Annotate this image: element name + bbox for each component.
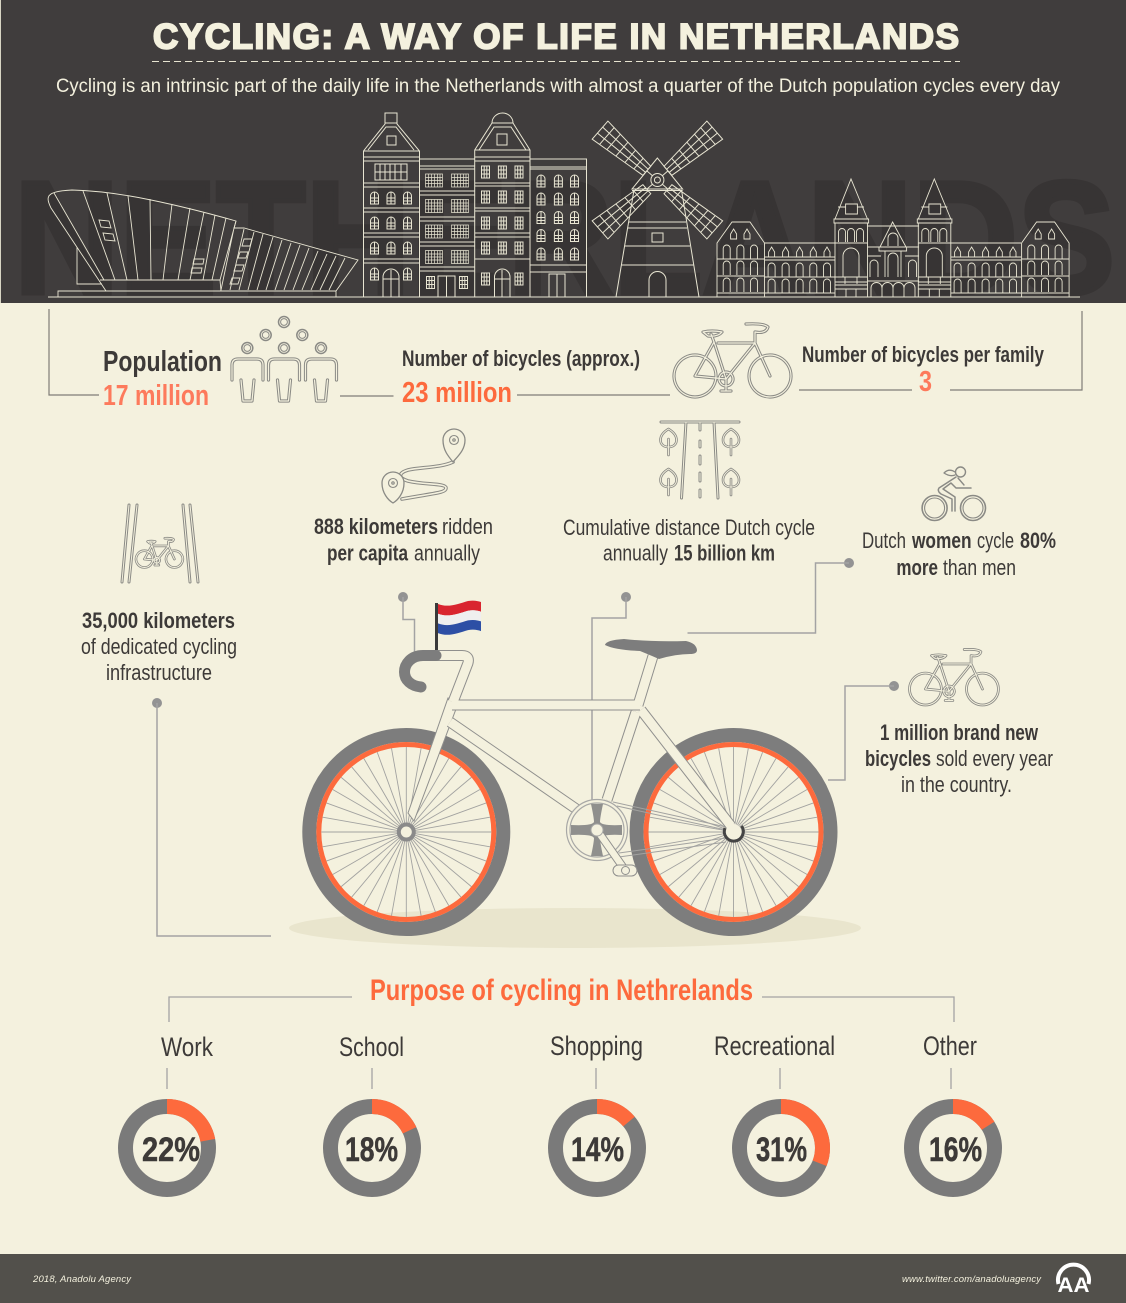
text: cumulative distance: 15 billion km — [674, 540, 775, 566]
text: dedicated infrastructure — [81, 608, 237, 685]
stat: number of bicycles: 23 million — [402, 377, 512, 409]
connector: top stats frame — [49, 309, 1082, 396]
heading: purpose of cycling: Purpose of cycling in Nethrelands — [370, 974, 753, 1007]
donut: recreational — [714, 1031, 835, 1190]
connector: cumulative distance — [592, 592, 631, 800]
text: cumulative distance — [563, 515, 815, 566]
stat: bicycles per family — [802, 342, 1045, 398]
icon: canal house D — [530, 159, 586, 297]
text: kilometers per capita: annually — [414, 540, 480, 566]
ground shadow — [289, 908, 861, 948]
text: bicycles sold: bicycles — [865, 746, 931, 771]
skyline illustration — [48, 113, 1080, 297]
icon: cycling lane — [122, 505, 198, 582]
text: dedicated infrastructure: 35,000 kilometers — [82, 608, 235, 633]
logo: AA — [1058, 1274, 1090, 1297]
icon: canal house A — [364, 113, 420, 297]
icon: route pins — [382, 429, 465, 503]
connector: infrastructure — [152, 698, 271, 936]
donut: work: Work — [161, 1032, 213, 1062]
stat: population — [103, 346, 222, 412]
donut: recreational: Recreational — [714, 1031, 835, 1061]
donut: other — [912, 1031, 994, 1190]
donut: work: 22% — [142, 1131, 200, 1169]
illustration: bicycle — [309, 601, 830, 929]
donut: school: School — [339, 1032, 404, 1062]
ground line — [48, 296, 1080, 298]
connector: sold — [828, 681, 899, 780]
rear wheel — [636, 735, 830, 929]
title underline — [152, 60, 960, 62]
text: women cycle more: Dutch — [862, 528, 906, 553]
footer — [0, 1254, 1126, 1303]
donut: shopping — [550, 1031, 643, 1190]
chain — [613, 802, 726, 857]
text: kilometers per capita: per capita — [327, 540, 409, 566]
icon: road with trees — [660, 422, 739, 498]
heading: purpose of cycling — [169, 974, 954, 1022]
credit: 2018, Anadolu Agency — [32, 1274, 132, 1285]
subtitle: Cycling is an intrinsic part of the daily life in the Netherlands with almost a quarter of the Dutch population cycles every day — [56, 76, 1060, 97]
text: cumulative distance: Cumulative distance Dutch cycle — [563, 515, 815, 540]
stat: number of bicycles: Number of bicycles (approx.) — [402, 346, 640, 371]
icon: canal house B — [420, 159, 474, 297]
icon: bicycle — [674, 324, 791, 397]
text: women cycle more: than men — [943, 555, 1016, 580]
stat: number of bicycles — [402, 346, 640, 409]
text: kilometers per capita: ridden — [442, 514, 493, 539]
text: dedicated infrastructure: infrastructure — [106, 660, 212, 685]
icon: windmill — [592, 121, 723, 297]
donut: shopping: 14% — [571, 1131, 624, 1169]
icon: NEMO building — [48, 190, 358, 297]
icon: people — [232, 316, 336, 401]
donut: school: 18% — [345, 1131, 398, 1169]
icon: museum — [717, 179, 1069, 297]
saddle — [605, 639, 697, 659]
text: bicycles sold — [865, 720, 1053, 797]
text: kilometers per capita — [314, 514, 493, 566]
text: bicycles sold: 1 million brand new — [880, 720, 1039, 745]
flag — [435, 601, 481, 650]
title: CYCLING: A WAY OF LIFE IN NETHERLANDS — [153, 18, 959, 56]
stat: bicycles per family: Number of bicycles per family — [802, 342, 1045, 367]
donut: other: 16% — [929, 1131, 982, 1169]
frame — [436, 656, 731, 826]
text: women cycle more: 80% — [1020, 528, 1056, 553]
text: bicycles sold: in the country. — [901, 772, 1012, 797]
logo — [1058, 1265, 1090, 1297]
header panel — [0, 0, 1126, 327]
donut: shopping: Shopping — [550, 1031, 643, 1061]
text: women cycle more — [862, 528, 1056, 580]
twitter link: www.twitter.com/anadoluagency — [902, 1274, 1042, 1285]
stat: bicycles per family: 3 — [919, 366, 932, 398]
donut: recreational: 31% — [756, 1131, 807, 1169]
text: bicycles sold: sold every year — [936, 746, 1053, 771]
donut: other: Other — [923, 1031, 977, 1061]
front wheel — [309, 735, 503, 929]
icon: canal house C — [475, 113, 530, 297]
text: women cycle more: more — [896, 555, 938, 580]
stat: population: Population — [103, 346, 222, 378]
text: dedicated infrastructure: of dedicated cycling — [81, 634, 237, 659]
rear hub — [724, 824, 743, 841]
connector: kilometers — [398, 592, 414, 652]
text: women cycle more: women — [911, 528, 972, 553]
text: kilometers per capita: 888 kilometers — [314, 514, 438, 539]
stat: population: 17 million — [103, 380, 209, 412]
front fork — [408, 698, 459, 821]
icon: woman cyclist — [922, 467, 986, 520]
donut: work — [126, 1032, 213, 1190]
icon: new bicycle — [910, 649, 998, 705]
text: cumulative distance: annually — [603, 540, 668, 566]
handlebar — [404, 656, 436, 687]
donut: school — [330, 1032, 414, 1190]
crank — [566, 800, 637, 876]
text: women cycle more: cycle — [977, 528, 1014, 553]
connector: women — [688, 558, 854, 633]
